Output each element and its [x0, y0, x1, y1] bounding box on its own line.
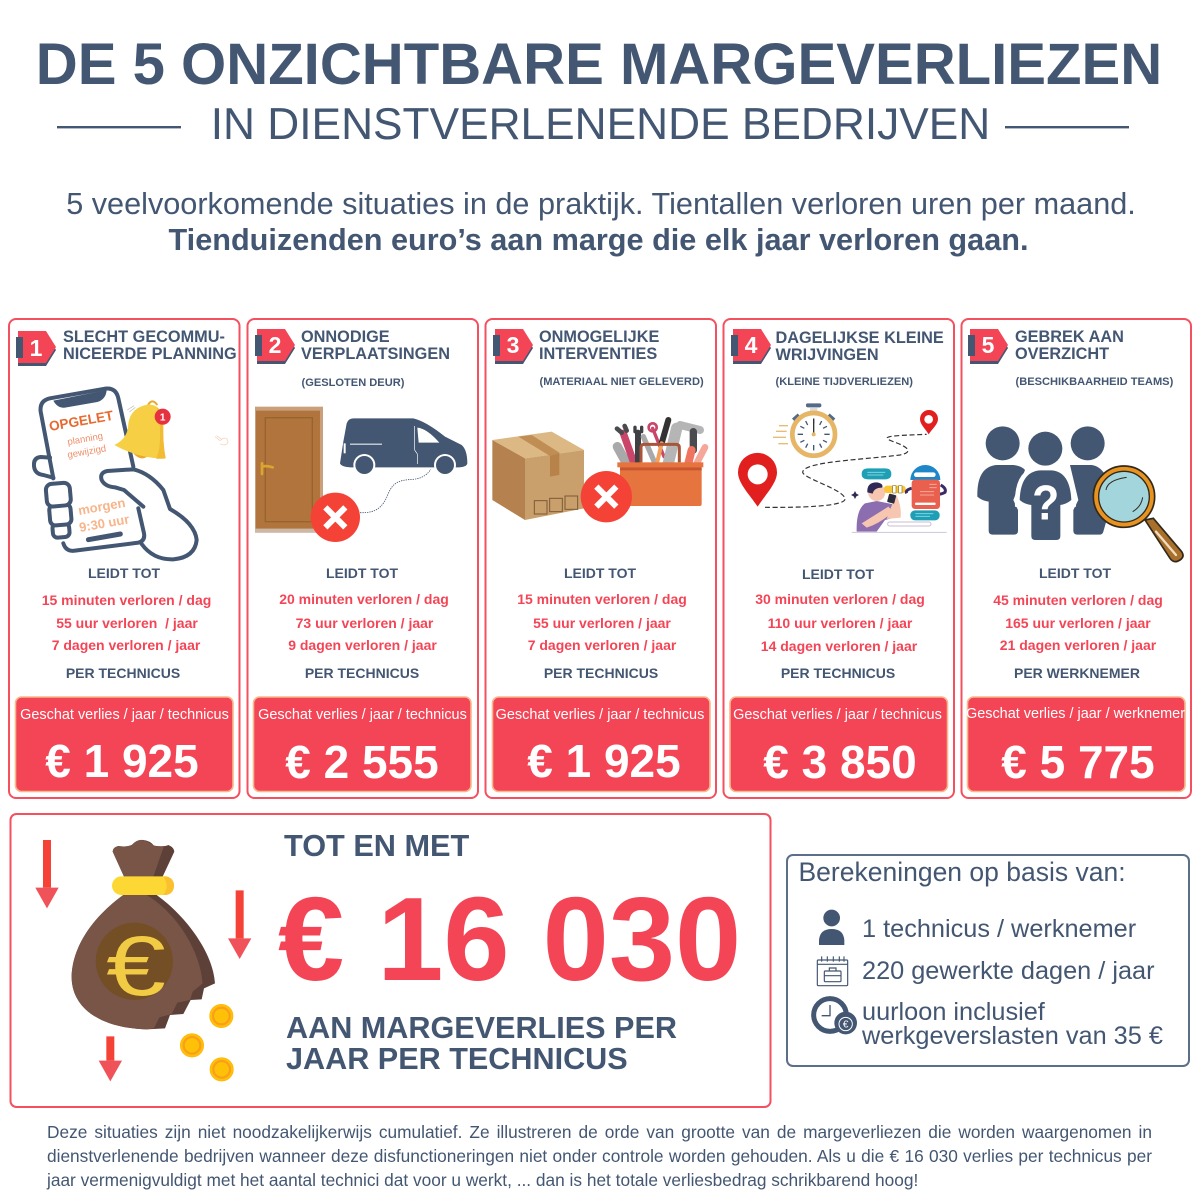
heading 5: (BESCHIKBAARHEID TEAMS) — [1016, 376, 1174, 388]
heading 2: VERPLAATSINGEN — [301, 345, 450, 363]
loss box 4: Geschat verlies / jaar / technicus — [733, 707, 942, 723]
basis rows: 1 technicus / werknemer — [862, 915, 1136, 943]
badge 4: 4 — [745, 332, 758, 358]
panel: calculation basis — [787, 855, 1189, 1066]
heading 4: WRIJVINGEN — [776, 346, 879, 364]
icon: box and toolbox — [492, 420, 705, 522]
icon: bell — [114, 401, 228, 459]
heading 3: (MATERIAAL NIET GELEVERD) — [540, 376, 704, 388]
footnote — [46, 1122, 1152, 1190]
heading 4: DAGELIJKSE KLEINE — [776, 329, 944, 347]
loss box 2: Geschat verlies / jaar / technicus — [258, 707, 467, 723]
leads to 4: 30 minuten verloren / dag — [755, 591, 925, 607]
total text: TOT EN MET — [284, 828, 470, 863]
title: DE 5 ONZICHTBARE MARGEVERLIEZEN — [36, 32, 1162, 97]
leads to 1 — [42, 565, 211, 681]
loss box 4 — [730, 697, 948, 792]
heading 2: (GESLOTEN DEUR) — [302, 377, 405, 389]
leads to 3: 7 dagen verloren / jaar — [528, 637, 677, 653]
heading 1: NICEERDE PLANNING — [63, 345, 237, 363]
leads to 4: PER TECHNICUS — [781, 665, 895, 681]
leads to 5 — [993, 565, 1163, 681]
total text: € 16 030 — [278, 873, 741, 1006]
leads to 5: PER WERKNEMER — [1014, 665, 1140, 681]
panel: total loss — [10, 814, 770, 1107]
loss box 3 — [492, 697, 710, 792]
icon: bell: 1 — [160, 412, 166, 423]
phone text: OPGELET — [48, 408, 115, 434]
heading 5: GEBREK AAN — [1015, 328, 1124, 346]
leads to 1: 55 uur verloren / jaar — [56, 615, 198, 631]
panel: card 4 — [724, 319, 954, 798]
intro text: 5 veelvoorkomende situaties in de praktijk. Tientallen verloren uren per maand. — [66, 187, 1136, 221]
icon: people and magnifier: ? — [1032, 475, 1059, 530]
leads to 5: 21 dagen verloren / jaar — [1000, 637, 1157, 653]
loss box 5: Geschat verlies / jaar / werknemer — [966, 706, 1185, 722]
loss box 4: € 3 850 — [763, 736, 917, 788]
badge 2: 2 — [269, 332, 281, 358]
leads to 2: 20 minuten verloren / dag — [279, 591, 449, 607]
leads to 3: LEIDT TOT — [564, 565, 636, 581]
icons: person, calendar, clock: € — [843, 1020, 849, 1031]
badge 5 — [968, 329, 1008, 364]
phone text: 9:30 uur — [78, 511, 130, 535]
leads to 1: 7 dagen verloren / jaar — [52, 637, 201, 653]
icons: person, calendar, clock — [814, 910, 857, 1034]
leads to 1: 15 minuten verloren / dag — [42, 592, 211, 608]
icon: money bag with arrows and coins: € — [106, 920, 166, 1013]
loss box 1: Geschat verlies / jaar / technicus — [20, 707, 229, 723]
leads to 4 — [755, 566, 925, 681]
heading 1 — [63, 328, 237, 363]
phone text: gewijzigd — [67, 443, 107, 461]
heading 3 — [539, 328, 704, 388]
loss box 1: € 1 925 — [45, 735, 199, 787]
heading 5: OVERZICHT — [1015, 345, 1109, 363]
leads to 3: 15 minuten verloren / dag — [517, 591, 687, 607]
icon: closed door and van — [255, 407, 467, 542]
basis rows: werkgeverslasten van 35 € — [861, 1022, 1163, 1050]
leads to 5: 165 uur verloren / jaar — [1005, 615, 1151, 631]
icon: phone with notification — [34, 389, 197, 559]
heading 4: (KLEINE TIJDVERLIEZEN) — [776, 376, 913, 388]
intro text — [66, 187, 1136, 257]
total text — [278, 828, 741, 1076]
badge 3 — [493, 329, 533, 364]
phone text: planning — [67, 431, 104, 448]
leads to 5: LEIDT TOT — [1039, 565, 1111, 581]
icon: stopwatch, route and person — [738, 403, 947, 532]
intro text: Tienduizenden euro’s aan marge die elk jaar verloren gaan. — [169, 223, 1028, 257]
badge 2 — [255, 329, 295, 364]
panel: card 2 — [248, 319, 478, 798]
loss box 3: Geschat verlies / jaar / technicus — [496, 707, 704, 723]
leads to 4: 110 uur verloren / jaar — [768, 615, 913, 631]
leads to 4: LEIDT TOT — [802, 566, 874, 582]
footnote: dienstverlenende bedrijven wanneer deze disfunctioneringen niet onder controle worden gehouden. Als u die € 16 030 verlies per technicus per — [47, 1146, 1152, 1166]
phone text: morgen — [77, 495, 127, 518]
badge 3: 3 — [507, 332, 519, 358]
leads to 3 — [517, 565, 687, 681]
phone text — [48, 408, 130, 535]
leads to 3: PER TECHNICUS — [544, 665, 658, 681]
leads to 5: 45 minuten verloren / dag — [993, 592, 1163, 608]
badge 5: 5 — [982, 332, 995, 358]
leads to 1: PER TECHNICUS — [66, 665, 180, 681]
footnote: Deze situaties zijn niet noodzakelijkerwijs cumulatief. Ze illustreren de orde van grootte van de margeverliezen die worden waargenomen in — [47, 1122, 1152, 1142]
heading 5 — [1015, 328, 1174, 388]
total text: JAAR PER TECHNICUS — [286, 1042, 628, 1076]
badge 1 — [16, 331, 56, 366]
loss box 3: € 1 925 — [527, 735, 681, 787]
heading 3: ONMOGELIJKE — [539, 328, 659, 346]
leads to 2: 9 dagen verloren / jaar — [288, 637, 437, 653]
loss box 1 — [16, 697, 233, 792]
badge 1: 1 — [30, 335, 43, 361]
loss box 5: € 5 775 — [1001, 736, 1155, 788]
heading 1: SLECHT GECOMMU- — [63, 328, 225, 346]
panel: card 3 — [486, 319, 716, 798]
basis rows: 220 gewerkte dagen / jaar — [862, 957, 1155, 985]
leads to 2 — [279, 565, 449, 681]
total text: AAN MARGEVERLIES PER — [286, 1011, 677, 1045]
heading 4 — [776, 329, 944, 388]
leads to 1: LEIDT TOT — [88, 565, 160, 581]
leads to 2: 73 uur verloren / jaar — [296, 615, 434, 631]
basis heading: Berekeningen op basis van: — [798, 857, 1126, 887]
basis rows — [861, 915, 1163, 1050]
panel: card 1 — [9, 319, 240, 798]
loss box 2 — [254, 697, 471, 792]
leads to 2: LEIDT TOT — [326, 565, 398, 581]
basis rows: uurloon inclusief — [862, 998, 1046, 1026]
leads to 3: 55 uur verloren / jaar — [533, 615, 671, 631]
heading 2 — [301, 328, 450, 389]
heading 3: INTERVENTIES — [539, 345, 657, 363]
loss box 5 — [966, 697, 1185, 792]
badge 4 — [731, 329, 771, 364]
icon: people and magnifier — [977, 426, 1183, 562]
subtitle with rules: IN DIENSTVERLENENDE BEDRIJVEN — [211, 100, 990, 149]
icon: money bag with arrows and coins — [35, 840, 251, 1081]
footnote: jaar vermenigvuldigt met het aantal technici dat voor u werkt, ... dan is het totale verliesbedrag schrikbarend hoog! — [47, 1170, 918, 1190]
panel: card 5 — [962, 319, 1191, 798]
leads to 4: 14 dagen verloren / jaar — [761, 638, 918, 654]
loss box 2: € 2 555 — [285, 736, 439, 788]
leads to 2: PER TECHNICUS — [305, 665, 419, 681]
heading 2: ONNODIGE — [301, 328, 390, 346]
